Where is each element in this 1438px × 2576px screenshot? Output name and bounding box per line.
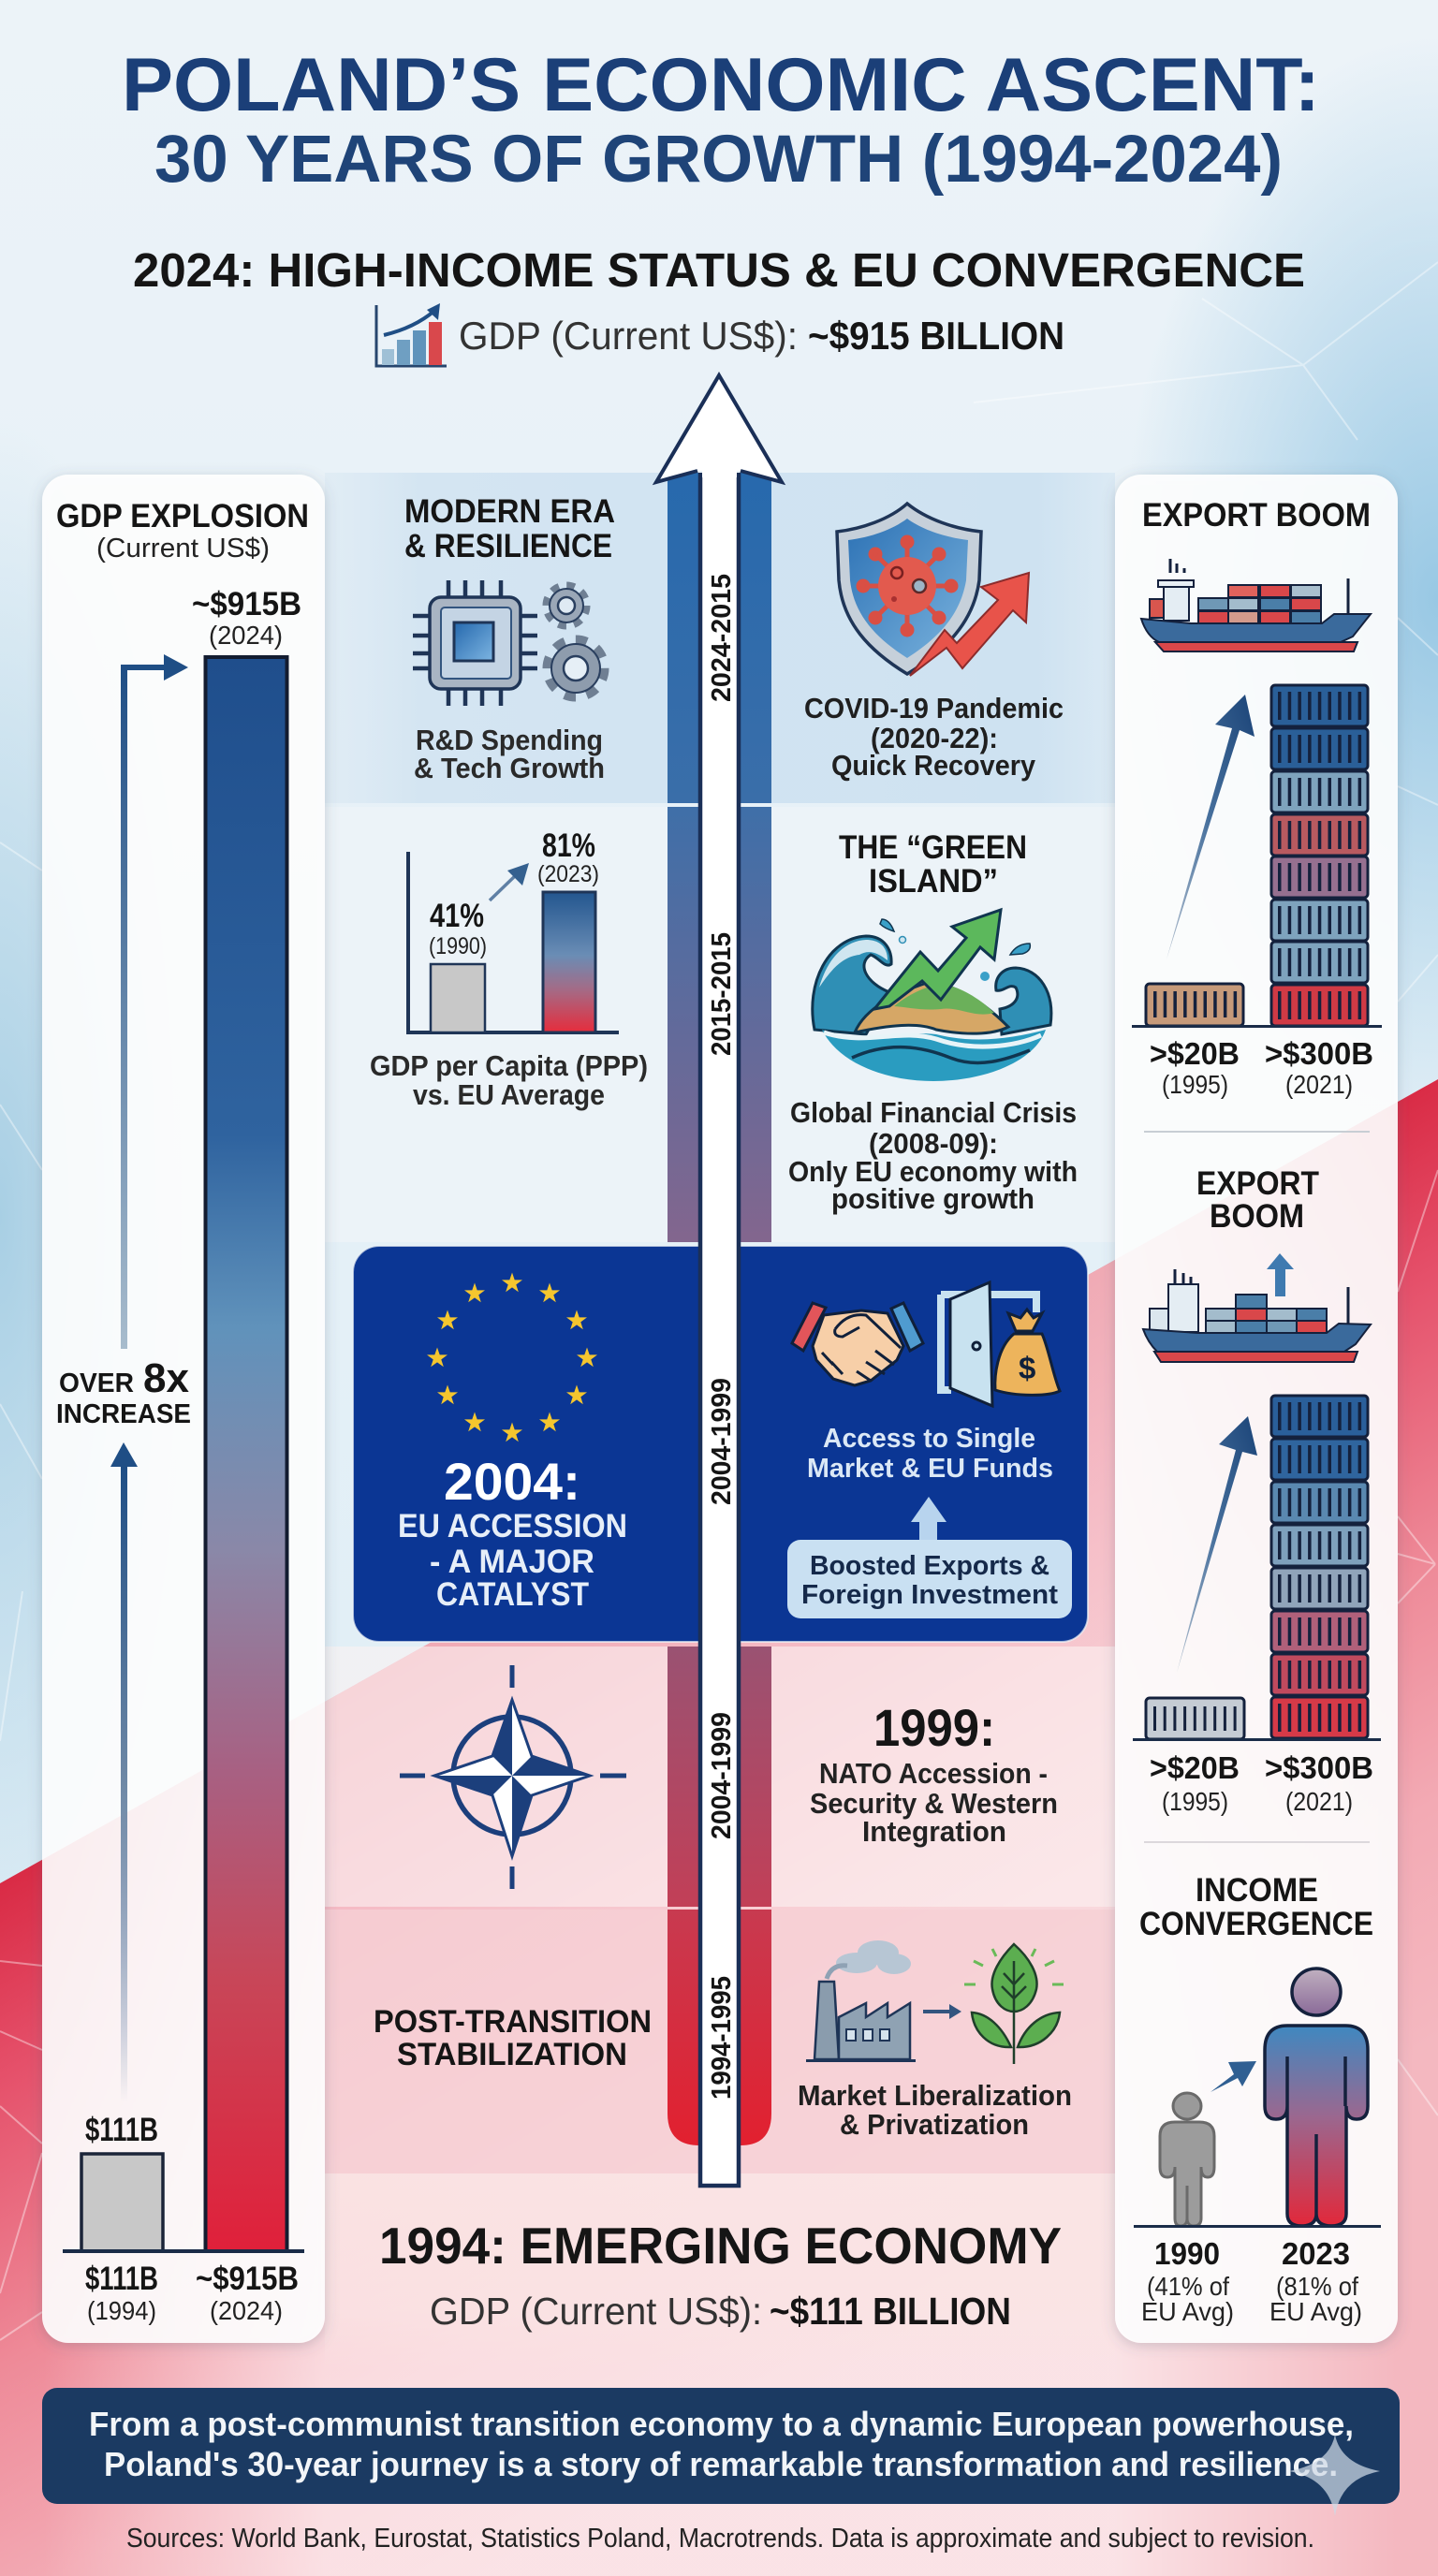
- labels: income values: [1141, 2236, 1362, 2326]
- chart axis: [1134, 2225, 1381, 2228]
- labels: export values: >$20B: [1150, 1036, 1240, 1071]
- icon: cargo ship: [1141, 559, 1371, 651]
- icon: shield with virus: [837, 504, 981, 674]
- label: 2024 value: ~$915B: [192, 586, 301, 622]
- text: global financial crisis: (2008-09):: [869, 1127, 998, 1160]
- labels: timeline periods: 1994-1995: [707, 1976, 737, 2100]
- chart axis: [1132, 1025, 1382, 1028]
- chart: container stack 1: [1271, 685, 1368, 1026]
- panel: 1994 background: [325, 2174, 1115, 2370]
- text: COVID-19: Quick Recovery: [831, 749, 1036, 782]
- labels: export values: (1995): [1162, 1070, 1228, 1099]
- chart: container stack 2: [1271, 1396, 1368, 1738]
- icon: recovery arrow: [910, 573, 1029, 676]
- label: 2024 value: (2024): [209, 621, 283, 650]
- labels: income values: 2023: [1282, 2236, 1350, 2271]
- panel: modern era background: [325, 473, 1115, 803]
- panel: GDP explosion: [42, 475, 325, 2343]
- text: GDP 1994: [430, 2290, 1011, 2333]
- heading: post-transition: STABILIZATION: [397, 2037, 627, 2072]
- icon: money bag: $: [1019, 1351, 1035, 1385]
- text: market liberalization: & Privatization: [840, 2108, 1029, 2141]
- heading: export boom second: EXPORT: [1196, 1165, 1319, 1202]
- text: GDP 1994: GDP (Current US$):: [430, 2290, 762, 2333]
- timeline band: 2024-2015: [668, 473, 771, 803]
- heading: GDP explosion: [56, 498, 309, 564]
- label: over 8x increase: INCREASE: [56, 1399, 191, 1429]
- arrow: up to single market: [911, 1497, 946, 1541]
- icon: money bag: [995, 1310, 1060, 1395]
- text: market liberalization: Market Liberalization: [798, 2079, 1072, 2112]
- heading: green island: ISLAND”: [869, 863, 998, 900]
- labels: below bars: (2024): [210, 2296, 283, 2325]
- panel: export and income: [1115, 475, 1398, 2343]
- labels: timeline periods: 2004-1999: [707, 1712, 737, 1839]
- callout: boosted exports: Boosted Exports &: [810, 1551, 1049, 1581]
- text: R&D spending: & Tech Growth: [414, 752, 605, 784]
- labels: export values second: >$20B: [1150, 1750, 1240, 1785]
- heading: 2024 status: 2024: HIGH-INCOME STATUS & EU CONVERGENCE: [133, 243, 1305, 297]
- label: 81%: 81%: [542, 827, 595, 864]
- title: [122, 43, 1320, 197]
- text: R&D spending: [414, 724, 605, 784]
- text: market liberalization: [798, 2079, 1072, 2141]
- labels: export values: (2021): [1285, 1070, 1353, 1099]
- labels: below bars: $111B: [85, 2261, 158, 2297]
- chart: small container 1995 second: [1146, 1698, 1244, 1739]
- heading: export boom second: [1196, 1165, 1319, 1235]
- labels: income values: 1990: [1154, 2236, 1220, 2271]
- heading: post-transition: POST-TRANSITION: [374, 2004, 652, 2040]
- label: 81%: [537, 827, 599, 887]
- text: GDP 2024: GDP (Current US$):: [459, 314, 798, 358]
- label: over 8x increase: OVER: [59, 1368, 134, 1398]
- text: 1999 NATO: 1999:: [873, 1698, 995, 1757]
- arrow: export growth second: [1177, 1416, 1257, 1673]
- text: GDP 2024: [459, 314, 1064, 358]
- heading: income convergence: CONVERGENCE: [1139, 1906, 1373, 1942]
- text: GDP per capita: vs. EU Average: [413, 1078, 605, 1111]
- labels: below bars: [85, 2261, 299, 2325]
- labels: export values second: >$300B: [1265, 1750, 1373, 1785]
- callout: closing statement: [42, 2388, 1400, 2504]
- chart axis: [63, 2249, 304, 2253]
- callout: boosted exports: [787, 1540, 1072, 1618]
- text: 1999 NATO: Security & Western: [810, 1787, 1058, 1820]
- icon: sparkle: [1289, 2435, 1380, 2516]
- text: R&D spending: R&D Spending: [416, 724, 603, 756]
- labels: export values: >$300B: [1265, 1036, 1373, 1071]
- callout: closing statement: From a post-communist transition economy to a dynamic European powerhouse,: [89, 2405, 1354, 2443]
- heading: 2004 EU accession: - A MAJOR: [430, 1544, 594, 1580]
- label: over 8x increase: [56, 1355, 191, 1429]
- chart: small container 1995: [1146, 984, 1243, 1026]
- heading: post-transition: [374, 2004, 652, 2072]
- labels: timeline periods: 2024-2015: [707, 574, 737, 702]
- timeline band: 1994-1999: [668, 1910, 771, 2145]
- text: COVID-19: COVID-19 Pandemic: [804, 692, 1064, 724]
- text: GDP 2024: ~$915 BILLION: [808, 314, 1064, 358]
- text: COVID-19: [804, 692, 1064, 782]
- title: 30 YEARS OF GROWTH (1994-2024): [154, 123, 1283, 197]
- icon: small person 1990: [1160, 2093, 1214, 2226]
- heading: GDP explosion: (Current US$): [96, 534, 270, 564]
- heading: 1994 emerging economy: 1994: EMERGING ECONOMY: [379, 2217, 1062, 2275]
- panel: post-transition background: [325, 1910, 1115, 2174]
- heading: income convergence: INCOME: [1196, 1872, 1318, 1909]
- icon: small gear: [547, 586, 586, 625]
- labels: export values: [1150, 1036, 1373, 1099]
- icon: NATO compass: [400, 1665, 626, 1889]
- text: GDP per capita: GDP per Capita (PPP): [370, 1049, 648, 1082]
- heading: modern era: & RESILIENCE: [404, 528, 612, 564]
- heading: 2004 EU accession: [398, 1452, 627, 1613]
- panel: EU accession: [353, 1246, 1088, 1642]
- heading: 2004 EU accession: CATALYST: [436, 1576, 589, 1613]
- icon: factory: [806, 1940, 916, 2062]
- icon: green sprout: [964, 1944, 1064, 2064]
- icon: microchip: [413, 580, 537, 706]
- arrow: export growth: [1167, 695, 1255, 959]
- text: single market: Market & EU Funds: [807, 1454, 1053, 1484]
- icon: up arrow: [1267, 1253, 1294, 1296]
- text: sources: Sources: World Bank, Eurostat, Statistics Poland, Macrotrends. Data is approximate and subject to revision.: [126, 2524, 1314, 2554]
- labels: export values second: [1150, 1750, 1373, 1816]
- text: single market: [807, 1424, 1053, 1484]
- icon: green island waves: [813, 910, 1051, 1081]
- text: GDP 1994: ~$111 BILLION: [770, 2290, 1011, 2333]
- label: over 8x increase: 8x: [143, 1355, 190, 1401]
- heading: 2004 EU accession: 2004:: [444, 1452, 580, 1511]
- text: global financial crisis: [788, 1096, 1078, 1215]
- timeline band: 2004-1999: [668, 1647, 771, 1907]
- heading: 2004 EU accession: EU ACCESSION: [398, 1508, 627, 1544]
- chart: small 1994 bar: [81, 2154, 163, 2251]
- label: 81%: (2023): [537, 861, 599, 887]
- text: 1999 NATO: [810, 1698, 1058, 1848]
- text: COVID-19: (2020-22):: [871, 722, 998, 754]
- heading: GDP explosion: GDP EXPLOSION: [56, 498, 309, 534]
- arrow: lower growth arrow: [110, 1442, 138, 2102]
- text: single market: Access to Single: [823, 1424, 1035, 1454]
- arrow: central timeline: [656, 375, 782, 2186]
- icon: cargo ship second: [1143, 1269, 1371, 1362]
- text: 1999 NATO: NATO Accession -: [819, 1757, 1048, 1790]
- text: global financial crisis: Global Financial Crisis: [790, 1096, 1077, 1129]
- text: global financial crisis: Only EU economy with: [788, 1155, 1078, 1188]
- labels: timeline periods: 2015-2015: [707, 932, 737, 1056]
- label: 111B above bar: $111B: [85, 2112, 158, 2148]
- labels: export values second: (2021): [1285, 1787, 1353, 1816]
- labels: timeline periods: [707, 574, 737, 2100]
- text: global financial crisis: positive growth: [831, 1182, 1034, 1215]
- heading: modern era: [404, 493, 615, 564]
- labels: income values: (41% of: [1147, 2272, 1229, 2301]
- icon: large gear: [548, 640, 604, 696]
- label: 41%: 41%: [430, 898, 484, 934]
- arrow: per capita growth: [490, 863, 529, 900]
- icon: handshake: [792, 1303, 923, 1385]
- arrow: factory to plant: [923, 2004, 961, 2019]
- label: 41%: [429, 898, 487, 959]
- icon: open door: [941, 1282, 1036, 1406]
- heading: modern era: MODERN ERA: [404, 493, 615, 530]
- arrow: income growth: [1211, 2061, 1256, 2092]
- icon: large person 2023: [1265, 1969, 1368, 2226]
- text: GDP per capita: [370, 1049, 648, 1111]
- labels: below bars: ~$915B: [196, 2261, 299, 2297]
- label: 2024 value: [192, 586, 301, 650]
- labels: income values: EU Avg): [1269, 2297, 1362, 2326]
- chart axis: [1133, 1738, 1381, 1741]
- labels: income values: EU Avg): [1141, 2297, 1234, 2326]
- labels: timeline periods: 2004-1999: [707, 1378, 737, 1505]
- arrow: upper growth arrow: [121, 654, 188, 1349]
- panel: NATO background: [325, 1647, 1115, 1907]
- callout: boosted exports: Foreign Investment: [801, 1580, 1058, 1610]
- icon: GDP growth chart: [376, 303, 447, 366]
- labels: export values second: (1995): [1162, 1787, 1228, 1816]
- labels: below bars: (1994): [87, 2296, 156, 2325]
- text: 1999 NATO: Integration: [862, 1815, 1006, 1848]
- heading: export boom second: BOOM: [1210, 1198, 1304, 1235]
- labels: income values: (81% of: [1276, 2272, 1358, 2301]
- callout: closing statement: Poland's 30-year journey is a story of remarkable transformation and resilience.: [104, 2445, 1338, 2483]
- timeline band: 2015-2004: [668, 807, 771, 1242]
- chart: GDP per capita: [408, 827, 619, 1032]
- chart: large gradient bar: [206, 657, 286, 2251]
- label: 41%: (1990): [429, 933, 487, 959]
- heading: green island: THE “GREEN: [839, 829, 1027, 866]
- heading: income convergence: [1139, 1872, 1373, 1942]
- title: POLAND’S ECONOMIC ASCENT:: [122, 43, 1320, 127]
- heading: green island: [839, 829, 1027, 900]
- icon: EU stars: [427, 1273, 597, 1442]
- heading: export boom: EXPORT BOOM: [1142, 497, 1371, 534]
- panel: green island background: [325, 807, 1115, 1242]
